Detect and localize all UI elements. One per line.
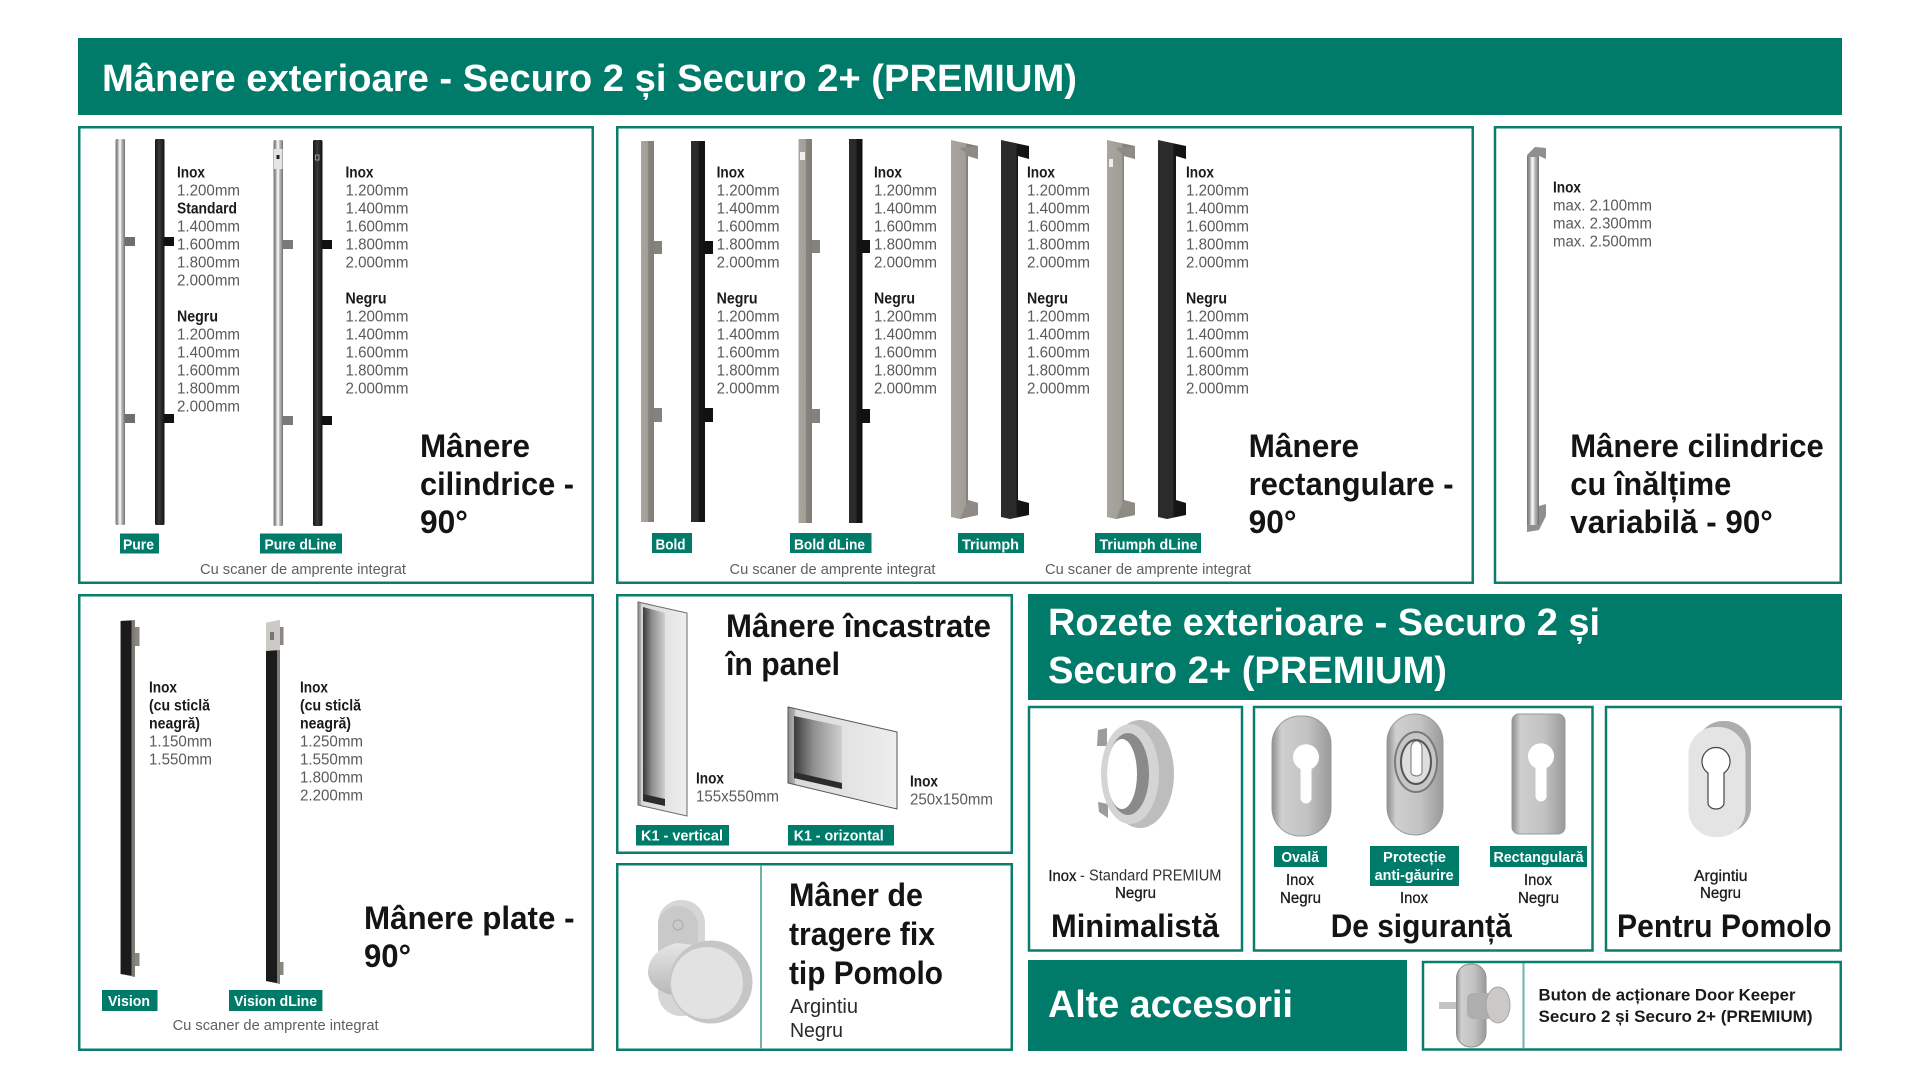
heading: exterior rosettes band: Securo 2+ (PREMIUM) xyxy=(1048,650,1447,692)
tag: Vision: Vision xyxy=(108,993,150,1010)
panel: Pomolo rosette xyxy=(1606,707,1841,950)
icon: rectangular rosette xyxy=(1512,714,1565,834)
heading: rectangular handles: rectangulare - xyxy=(1249,466,1454,502)
text block: oval colours xyxy=(1280,872,1321,907)
text block: Bold dLine sizes: 1.200mm xyxy=(874,308,937,326)
icon: K1 horizontal handle xyxy=(788,707,897,809)
text block: Bold sizes: 1.600mm xyxy=(717,218,780,236)
heading: recessed handles: Mânere încastrate xyxy=(726,608,991,644)
caption: Bold dLine scanner: Cu scaner de amprente integrat xyxy=(730,561,936,578)
text block: rectangular colours: Inox xyxy=(1524,872,1552,889)
text block: Pure dLine sizes: 1.800mm xyxy=(346,362,408,380)
heading: De siguranță: De siguranță xyxy=(1331,908,1512,944)
tag: oval xyxy=(1274,846,1327,867)
text block: Vision dLine sizes: Inox xyxy=(300,680,328,696)
text block: Bold dLine sizes: 2.000mm xyxy=(874,380,937,398)
panel: flat handles xyxy=(79,595,593,1050)
text block: Vision dLine sizes: 1.550mm xyxy=(300,752,363,768)
heading: exterior rosettes band: Rozete exterioare - Securo 2 și xyxy=(1048,602,1600,644)
icon: K1 vertical handle xyxy=(638,602,687,816)
tag: Pure: Pure xyxy=(123,536,154,554)
tag: Pure dLine: Pure dLine xyxy=(264,536,336,554)
text block: Vision dLine sizes xyxy=(300,680,363,804)
heading: flat handles: 90° xyxy=(364,938,411,974)
text block: Bold sizes: 1.200mm xyxy=(717,308,780,326)
heading: other accessories band xyxy=(1028,960,1407,1051)
text block: Triumph dLine sizes: 1.200mm xyxy=(1186,182,1249,200)
heading: flat handles: Mânere plate - xyxy=(364,900,574,936)
text block: Pomolo rosette colours xyxy=(1694,868,1748,902)
text block: Triumph sizes: 1.400mm xyxy=(1027,326,1090,344)
text block: handle sizes: max. 2.100mm xyxy=(1553,198,1652,214)
icon: Pure inox handle xyxy=(116,139,135,525)
text block: Pure sizes: 1.400mm xyxy=(177,344,240,362)
text block: Triumph sizes: 1.200mm xyxy=(1027,182,1090,200)
icon: Pure dLine inox handle xyxy=(274,140,293,526)
panel: Door Keeper button xyxy=(1423,962,1841,1050)
text block: Bold dLine sizes: 2.000mm xyxy=(874,254,937,272)
text block: Bold sizes: 2.000mm xyxy=(717,380,780,398)
text block: Pure sizes: Inox xyxy=(177,164,205,182)
heading: other accessories band: Alte accesorii xyxy=(1048,984,1293,1026)
title: main header band xyxy=(78,38,1842,115)
text block: Vision dLine sizes: 1.250mm xyxy=(300,734,363,750)
text block: Vision sizes: neagră) xyxy=(149,716,200,732)
text block: Bold dLine sizes: Inox xyxy=(874,164,902,182)
text block: Pure sizes: Standard xyxy=(177,200,237,218)
icon: Pure dLine black handle xyxy=(313,140,332,526)
text block: Bold sizes: 1.200mm xyxy=(717,182,780,200)
text block: Vision sizes xyxy=(149,680,212,768)
text block: Triumph dLine sizes: 1.200mm xyxy=(1186,308,1249,326)
text block: Triumph sizes xyxy=(1027,164,1090,398)
text block: Vision dLine sizes: (cu sticlă xyxy=(300,698,361,714)
heading: variable height: variabilă - 90° xyxy=(1570,504,1773,540)
tag: Bold dLine: Bold dLine xyxy=(794,536,865,554)
text block: Bold dLine sizes: 1.600mm xyxy=(874,344,937,362)
heading: variable height xyxy=(1570,428,1824,540)
text block: minimal colours: - Standard PREMIUM xyxy=(1080,868,1222,884)
heading: rectangular handles xyxy=(1249,428,1454,540)
text block: handle sizes: max. 2.300mm xyxy=(1553,216,1652,232)
text block: rectangular colours xyxy=(1518,872,1559,907)
text block: Triumph sizes: 1.800mm xyxy=(1027,362,1090,380)
heading: exterior rosettes band xyxy=(1028,594,1842,700)
text block: K1 vertical size: Inox xyxy=(696,770,724,788)
tag: anti-drill protection: Protecție xyxy=(1383,849,1446,866)
text block: Vision dLine sizes: 2.200mm xyxy=(300,788,363,804)
tag: rectangular: Rectangulară xyxy=(1494,849,1584,866)
heading: Minimalistă: Minimalistă xyxy=(1051,908,1219,944)
caption: Triumph dLine scanner: Cu scaner de amprente integrat xyxy=(1045,561,1252,578)
text block: Pure sizes: 1.200mm xyxy=(177,182,240,200)
heading: Pomolo handle: tragere fix xyxy=(789,916,935,952)
text block: Bold sizes: 1.400mm xyxy=(717,326,780,344)
heading: recessed handles: în panel xyxy=(724,646,840,682)
icon: Bold black handle xyxy=(691,141,713,522)
tag: Vision dLine: Vision dLine xyxy=(234,993,317,1010)
text block: K1 horizontal size: 250x150mm xyxy=(910,792,993,808)
tag: Bold xyxy=(652,533,692,554)
text block: Bold dLine sizes xyxy=(874,164,937,398)
icon: long cylindrical handle xyxy=(1527,147,1546,532)
text block: Pure sizes xyxy=(177,164,240,416)
text block: Triumph dLine sizes xyxy=(1186,164,1249,398)
tag: anti-drill protection: anti-găurire xyxy=(1375,867,1454,884)
text block: Door Keeper description: Securo 2 și Securo 2+ (PREMIUM) xyxy=(1538,1007,1812,1026)
tag: anti-drill protection xyxy=(1370,846,1459,886)
text block: Triumph sizes: Inox xyxy=(1027,164,1055,182)
text block: Door Keeper description: Buton de acționare Door Keeper xyxy=(1538,986,1796,1004)
text block: Bold sizes: Inox xyxy=(717,164,745,182)
text block: Pure sizes: 1.600mm xyxy=(177,362,240,380)
text block: Pure dLine sizes: 1.400mm xyxy=(346,326,408,344)
text block: handle sizes: Inox xyxy=(1553,180,1581,196)
text block: Pure sizes: 1.800mm xyxy=(177,254,240,272)
text block: Pure dLine sizes: 1.600mm xyxy=(346,218,408,236)
text block: Pure dLine sizes: 1.200mm xyxy=(346,182,408,200)
text block: Pure sizes: 2.000mm xyxy=(177,398,240,416)
text block: Triumph dLine sizes: Negru xyxy=(1186,290,1227,308)
text block: Vision dLine sizes: neagră) xyxy=(300,716,351,732)
icon: Pomolo rosette xyxy=(1688,721,1751,837)
caption: Vision dLine scanner: Cu scaner de amprente integrat xyxy=(173,1017,379,1034)
heading: variable height: cu înălțime xyxy=(1570,466,1731,502)
text block: oval colours: Negru xyxy=(1280,890,1321,907)
text block: Triumph sizes: 1.600mm xyxy=(1027,344,1090,362)
text block: Bold sizes: 1.400mm xyxy=(717,200,780,218)
heading: rectangular handles: Mânere xyxy=(1249,428,1359,464)
panel: Pomolo pull handle xyxy=(617,864,1012,1050)
panel: rectangular handles xyxy=(617,127,1473,583)
text block: Pure dLine sizes: 1.400mm xyxy=(346,200,408,218)
text block: Bold dLine sizes: 1.800mm xyxy=(874,362,937,380)
text block: minimal colours: Negru xyxy=(1115,885,1156,902)
text block: Bold dLine sizes: Negru xyxy=(874,290,915,308)
text block: Pomolo rosette colours: Argintiu xyxy=(1694,868,1748,885)
text block: Triumph dLine sizes: 1.600mm xyxy=(1186,344,1249,362)
text block: oval colours: Inox xyxy=(1286,872,1314,889)
text block: Bold dLine sizes: 1.200mm xyxy=(874,182,937,200)
text block: Triumph dLine sizes: 1.800mm xyxy=(1186,362,1249,380)
text block: Triumph sizes: 1.200mm xyxy=(1027,308,1090,326)
text block: Pure dLine sizes: 1.600mm xyxy=(346,344,408,362)
text block: Pomolo colours xyxy=(790,996,858,1042)
text block: Vision sizes: Inox xyxy=(149,680,177,696)
heading: cylindrical handles: 90° xyxy=(420,504,468,540)
tag: Triumph: Triumph xyxy=(962,536,1019,554)
icon: Triumph dLine black handle xyxy=(1158,140,1186,519)
text block: Triumph sizes: Negru xyxy=(1027,290,1068,308)
text block: handle sizes: max. 2.500mm xyxy=(1553,234,1652,250)
tag: Triumph dLine: Triumph dLine xyxy=(1100,536,1198,554)
title: main header band: Mânere exterioare - Securo 2 și Securo 2+ (PREMIUM) xyxy=(102,58,1077,100)
tag: K1 horizontal: K1 - orizontal xyxy=(794,828,884,844)
text block: Door Keeper description xyxy=(1538,986,1812,1026)
text block: K1 horizontal size: Inox xyxy=(910,774,938,790)
icon: Triumph black handle xyxy=(1001,140,1029,519)
icon: Door Keeper knob xyxy=(1439,964,1510,1047)
text block: Pomolo colours: Argintiu xyxy=(790,996,858,1018)
icon: Triumph inox handle xyxy=(951,140,978,519)
text block: handle sizes xyxy=(1553,180,1652,250)
text block: Bold sizes: 1.800mm xyxy=(717,362,780,380)
heading: cylindrical handles xyxy=(420,428,574,540)
icon: Triumph dLine inox handle xyxy=(1107,140,1135,519)
icon: Bold dLine black handle xyxy=(849,139,870,523)
heading: cylindrical handles: Mânere xyxy=(420,428,530,464)
heading: Pentru Pomolo: Pentru Pomolo xyxy=(1617,908,1832,944)
heading: rectangular handles: 90° xyxy=(1249,504,1297,540)
heading: recessed handles xyxy=(724,608,991,682)
heading: flat handles xyxy=(364,900,574,974)
panel: security rosettes xyxy=(1254,707,1592,950)
text block: K1 vertical size: 155x550mm xyxy=(696,788,779,806)
icon: Bold inox handle xyxy=(641,141,662,522)
text block: Bold dLine sizes: 1.600mm xyxy=(874,218,937,236)
text block: minimal colours xyxy=(1048,868,1222,902)
text block: Pure sizes: Negru xyxy=(177,308,218,326)
text block: Triumph dLine sizes: Inox xyxy=(1186,164,1214,182)
text block: Pure dLine sizes: Negru xyxy=(346,290,386,308)
text block: Vision sizes: (cu sticlă xyxy=(149,698,210,714)
heading: variable height: Mânere cilindrice xyxy=(1570,428,1824,464)
icon: anti-drill rosette xyxy=(1387,714,1443,835)
text block: Triumph sizes: 1.800mm xyxy=(1027,236,1090,254)
text block: Triumph sizes: 1.400mm xyxy=(1027,200,1090,218)
panel: recessed panel handles xyxy=(617,595,1012,853)
text block: Triumph sizes: 1.600mm xyxy=(1027,218,1090,236)
text block: K1 horizontal size xyxy=(910,774,993,808)
panel: variable height cylindrical handle xyxy=(1495,127,1841,583)
text block: Bold dLine sizes: 1.800mm xyxy=(874,236,937,254)
text block: Triumph dLine sizes: 1.400mm xyxy=(1186,200,1249,218)
text block: anti-drill colour: Inox xyxy=(1400,890,1428,907)
text block: Bold dLine sizes: 1.400mm xyxy=(874,200,937,218)
text block: Bold sizes: 1.800mm xyxy=(717,236,780,254)
text block: Vision sizes: 1.550mm xyxy=(149,752,212,768)
text block: Triumph dLine sizes: 1.400mm xyxy=(1186,326,1249,344)
text block: rectangular colours: Negru xyxy=(1518,890,1559,907)
heading: cylindrical handles: cilindrice - xyxy=(420,466,574,502)
text block: Pure sizes: 1.200mm xyxy=(177,326,240,344)
text block: Triumph dLine sizes: 2.000mm xyxy=(1186,254,1249,272)
text block: Pomolo rosette colours: Negru xyxy=(1700,885,1741,902)
text block: Pure sizes: 1.800mm xyxy=(177,380,240,398)
text block: Triumph dLine sizes: 1.600mm xyxy=(1186,218,1249,236)
text block: Bold sizes xyxy=(717,164,780,398)
icon: Vision dLine handle xyxy=(266,620,284,984)
heading: Pomolo handle: Mâner de xyxy=(789,877,923,913)
text block: Triumph sizes: 2.000mm xyxy=(1027,254,1090,272)
text block: Triumph sizes: 2.000mm xyxy=(1027,380,1090,398)
icon: oval rosette xyxy=(1272,716,1331,836)
text block: Pure sizes: 2.000mm xyxy=(177,272,240,290)
icon: minimal ring xyxy=(1097,720,1174,828)
heading: Pomolo handle: tip Pomolo xyxy=(789,955,943,991)
icon: Bold dLine inox handle xyxy=(798,139,820,523)
icon: Vision handle xyxy=(121,620,140,977)
text block: Vision sizes: 1.150mm xyxy=(149,734,212,750)
text block: Pure dLine sizes: 1.200mm xyxy=(346,308,408,326)
text block: Pure dLine sizes: 1.800mm xyxy=(346,236,408,254)
text block: K1 vertical size xyxy=(696,770,779,806)
heading: Pomolo handle xyxy=(789,877,943,991)
text block: minimal colours: Inox xyxy=(1048,868,1077,885)
text block: Pure sizes: 1.600mm xyxy=(177,236,240,254)
text block: Bold sizes: Negru xyxy=(717,290,758,308)
text block: Bold dLine sizes: 1.400mm xyxy=(874,326,937,344)
text block: Triumph dLine sizes: 2.000mm xyxy=(1186,380,1249,398)
text block: Bold sizes: 2.000mm xyxy=(717,254,780,272)
text block: Vision dLine sizes: 1.800mm xyxy=(300,770,363,786)
text block: Pomolo colours: Negru xyxy=(790,1020,843,1042)
text block: Pure dLine sizes: 2.000mm xyxy=(346,380,408,398)
panel: minimal rosette xyxy=(1029,707,1242,950)
caption: fingerprint scanner: Cu scaner de amprente integrat xyxy=(200,561,407,578)
text block: Bold sizes: 1.600mm xyxy=(717,344,780,362)
tag: Bold: Bold xyxy=(656,536,686,554)
text block: Triumph dLine sizes: 1.800mm xyxy=(1186,236,1249,254)
text block: Pure dLine sizes: 2.000mm xyxy=(346,254,408,272)
text block: Pure sizes: 1.400mm xyxy=(177,218,240,236)
tag: oval: Ovală xyxy=(1281,849,1319,866)
tag: Vision xyxy=(102,990,158,1011)
text block: Pure dLine sizes: Inox xyxy=(346,164,374,182)
icon: Pure black handle xyxy=(155,139,174,525)
icon: Pomolo knob xyxy=(648,900,752,1024)
tag: K1 vertical: K1 - vertical xyxy=(641,828,723,844)
text block: Pure dLine sizes xyxy=(346,164,408,398)
panel: cylindrical handles xyxy=(79,127,593,583)
